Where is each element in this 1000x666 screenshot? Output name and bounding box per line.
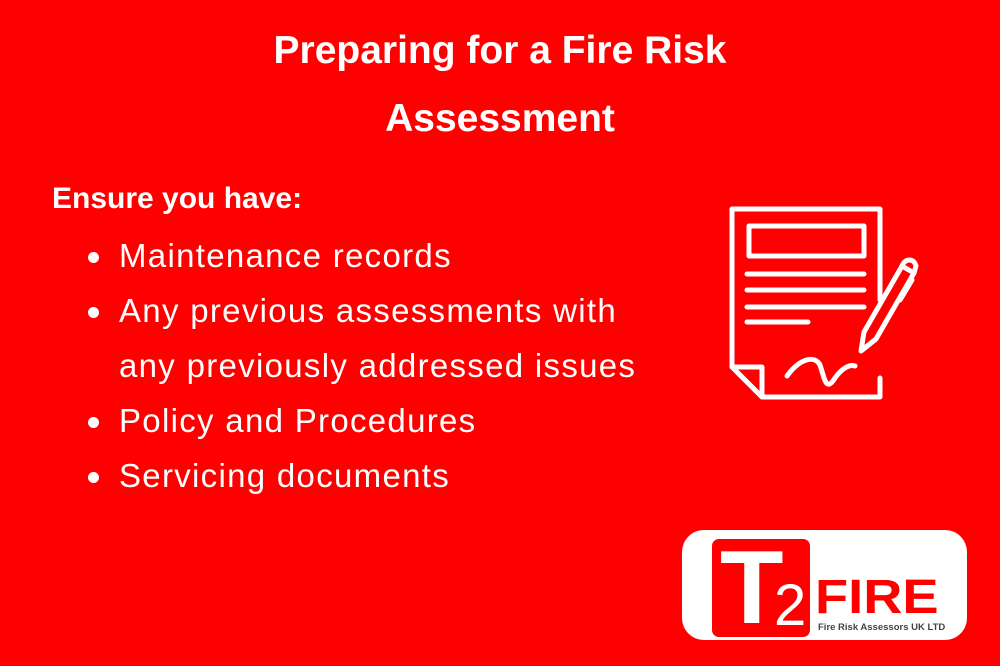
logo: Fire Risk Assessors UK LTD <box>818 622 945 633</box>
logo mark: T <box>720 530 784 646</box>
title: Assessment <box>385 97 615 140</box>
logo text: FIRE <box>815 571 939 624</box>
bullet list: Any previous assessments with <box>119 292 617 329</box>
subheading: Ensure you have: <box>52 182 302 215</box>
bullet list: Servicing documents <box>119 457 450 494</box>
bullet list <box>88 237 636 494</box>
bullet list: any previously addressed issues <box>119 347 636 384</box>
logo <box>682 530 967 640</box>
logo mark <box>712 539 810 637</box>
title <box>274 29 726 140</box>
logo mark: 2 <box>774 573 806 638</box>
icon: signed document <box>730 206 918 400</box>
bullet list: Policy and Procedures <box>119 402 476 439</box>
title: Preparing for a Fire Risk <box>274 29 726 72</box>
bullet list: Maintenance records <box>119 237 452 274</box>
